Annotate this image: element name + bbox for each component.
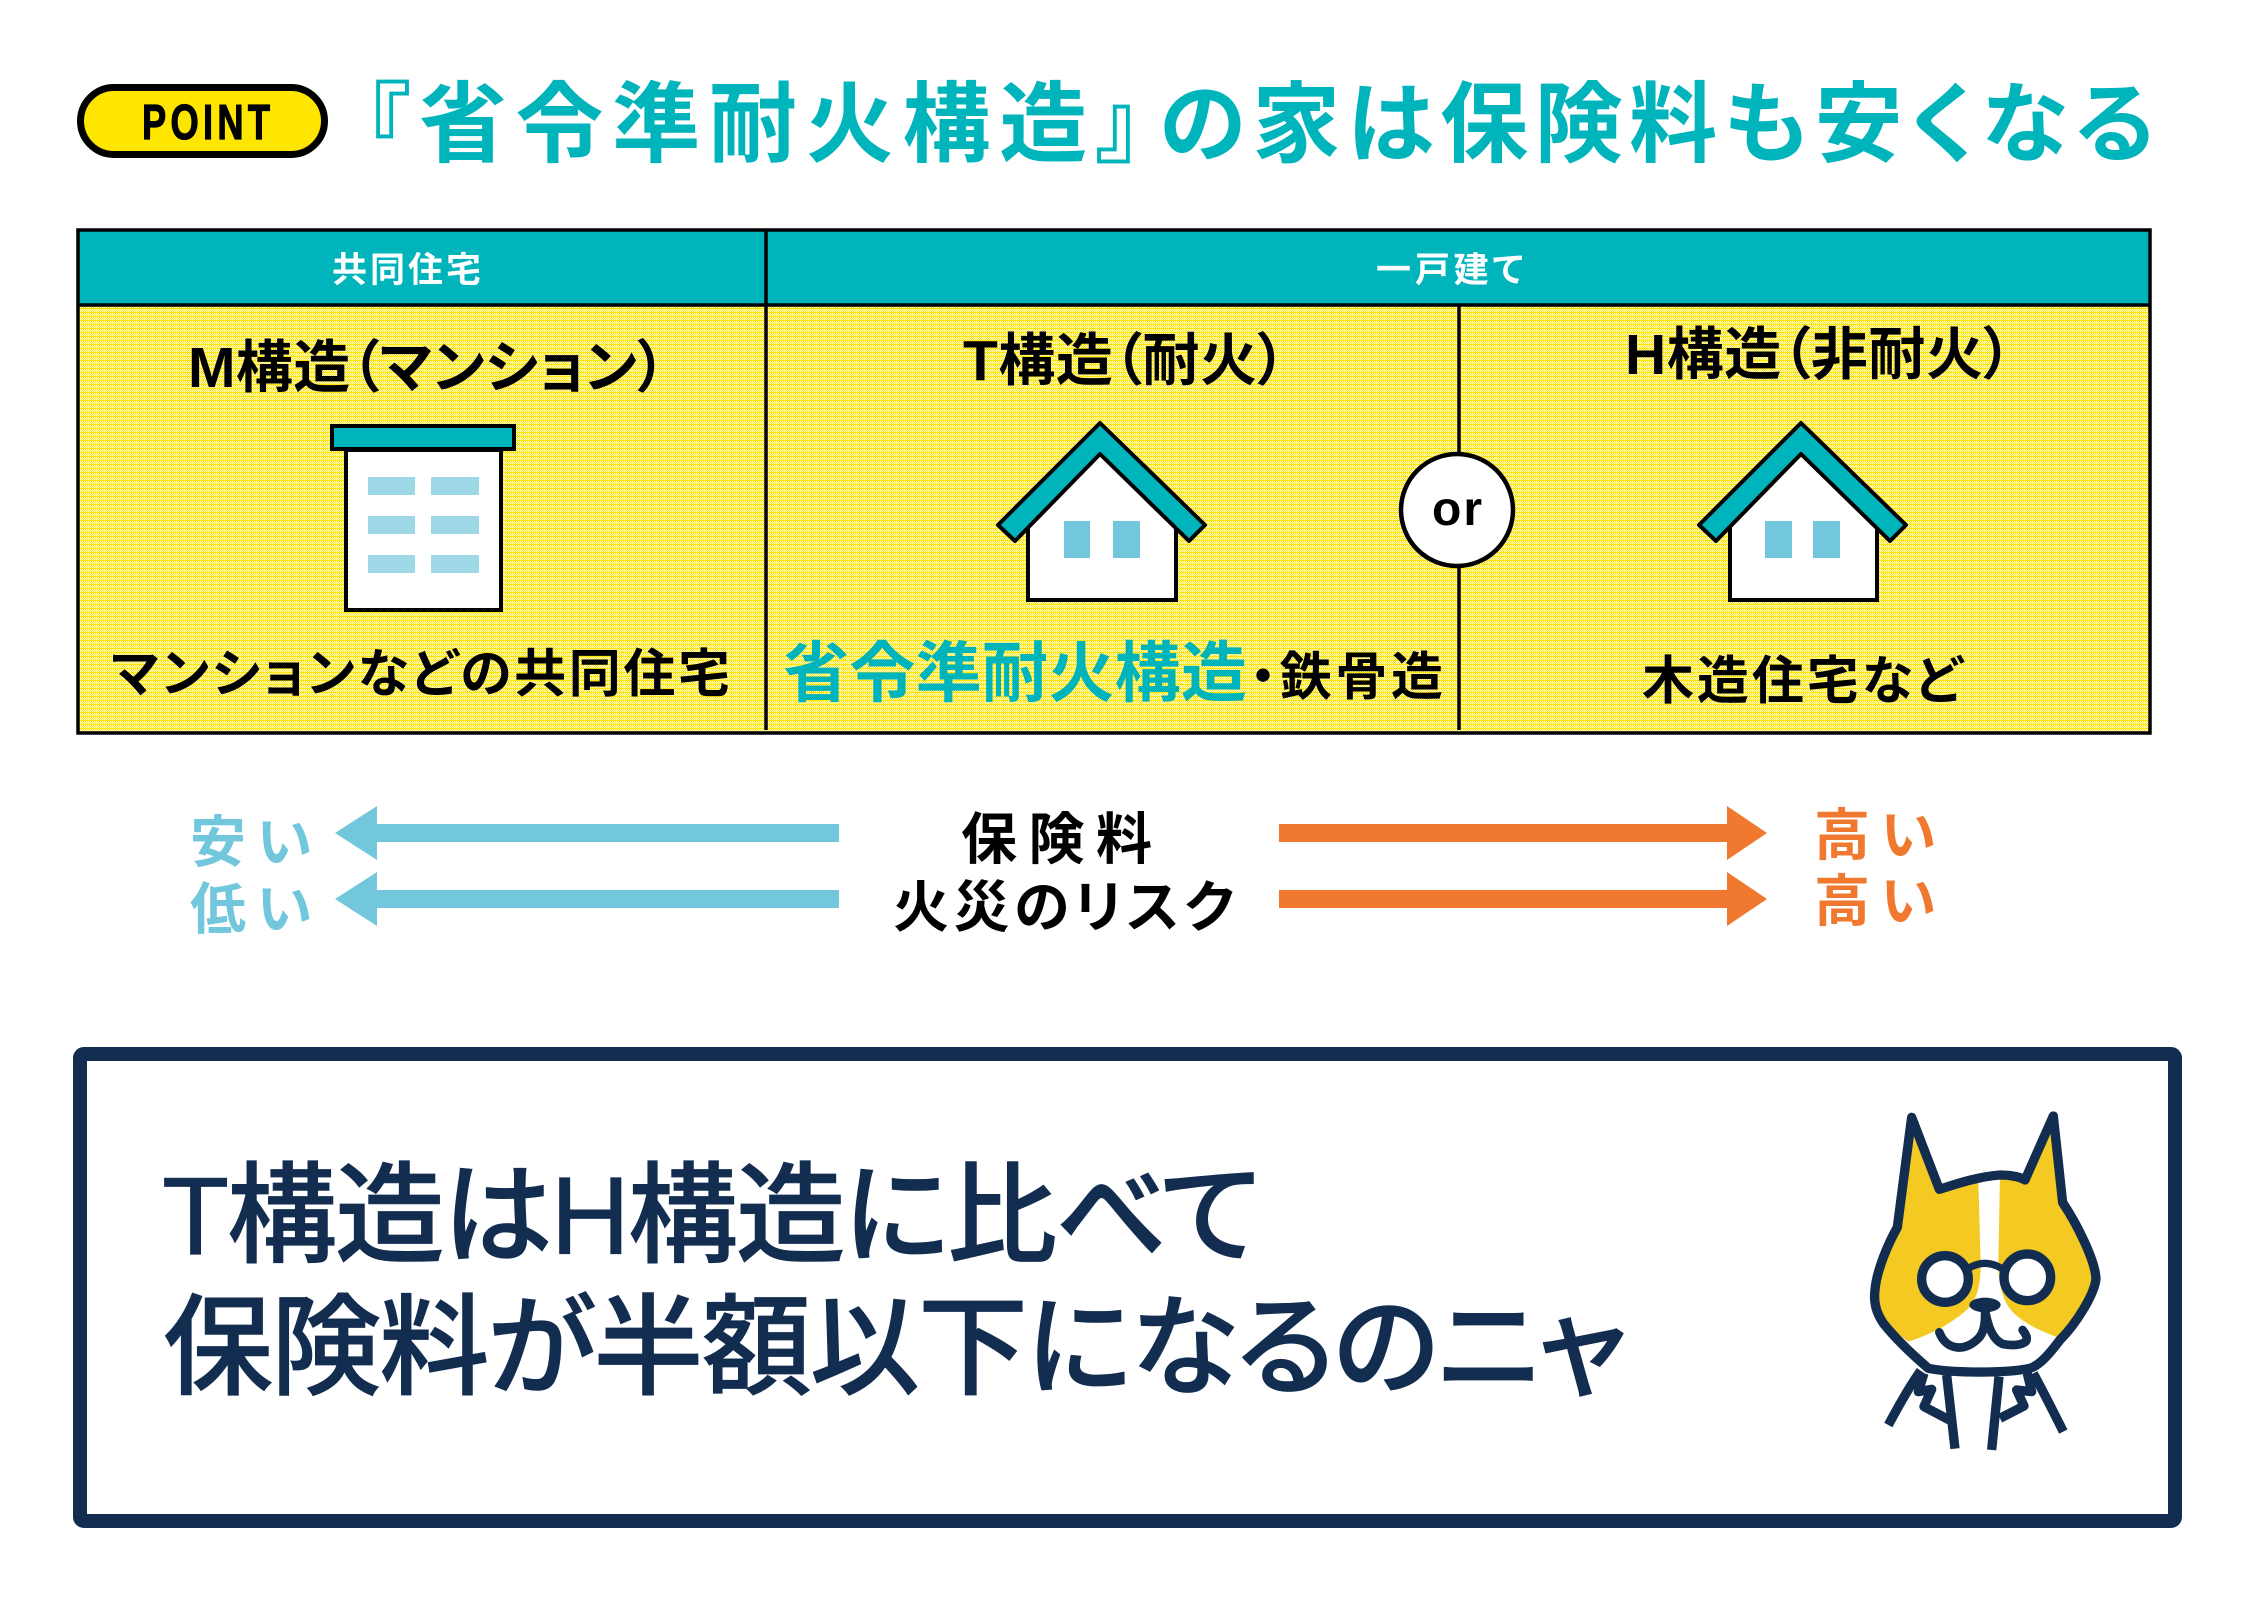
badge: or: or [1432, 483, 1484, 536]
panel: comparison table [78, 230, 2150, 733]
title: 『省令準耐火構造』 [366, 75, 1140, 174]
label: low: 低い [190, 878, 312, 941]
header: detached: 一戸建て [1376, 251, 1523, 290]
label: quasi-fireproof caption: 省令準耐火構造 [783, 636, 1247, 710]
label: high insurance: 高い [1814, 804, 1936, 867]
icon: apartment building [332, 426, 514, 610]
badge: POINT: POINT [142, 96, 270, 150]
label: high risk: 高い [1814, 870, 1936, 933]
arrows: insurance row right [1279, 806, 1767, 860]
heading: M structure: M構造（マンション） [188, 336, 666, 400]
badge: POINT [80, 88, 324, 154]
heading: H structure: H構造（非耐火） [1625, 323, 2012, 387]
panel: conclusion box [80, 1054, 2175, 1521]
title [366, 75, 2155, 174]
icon: H structure house [1699, 423, 1906, 600]
arrows: fire risk row right [1279, 872, 1767, 926]
header: apartment: 共同住宅 [332, 251, 481, 290]
yellow table body [78, 305, 2150, 732]
label: apartment caption: マンションなどの共同住宅 [111, 646, 730, 704]
icon: T structure house [998, 423, 1205, 600]
label: cheap: 安い [190, 811, 312, 874]
label: wooden caption: 木造住宅など [1642, 653, 1966, 711]
arrows: fire risk row left [335, 872, 839, 926]
arrows: insurance row left [335, 806, 839, 860]
heading: T structure: T構造（耐火） [963, 329, 1286, 393]
table lines [78, 230, 2150, 733]
icon: cat with glasses [1875, 1116, 2096, 1450]
title: の家は保険料も安くなる [1159, 75, 2155, 174]
table header band [78, 230, 2150, 305]
conclusion text line 2: 保険料が半額以下になるのニャ [163, 1287, 1627, 1410]
label: fire risk: 火災のリスク [893, 876, 1234, 939]
label: steel caption: ・鉄骨造 [1250, 649, 1443, 707]
conclusion text line 1: T構造はH構造に比べて [162, 1155, 1262, 1278]
badge: or [1401, 454, 1513, 566]
label: insurance: 保険料 [961, 808, 1152, 871]
